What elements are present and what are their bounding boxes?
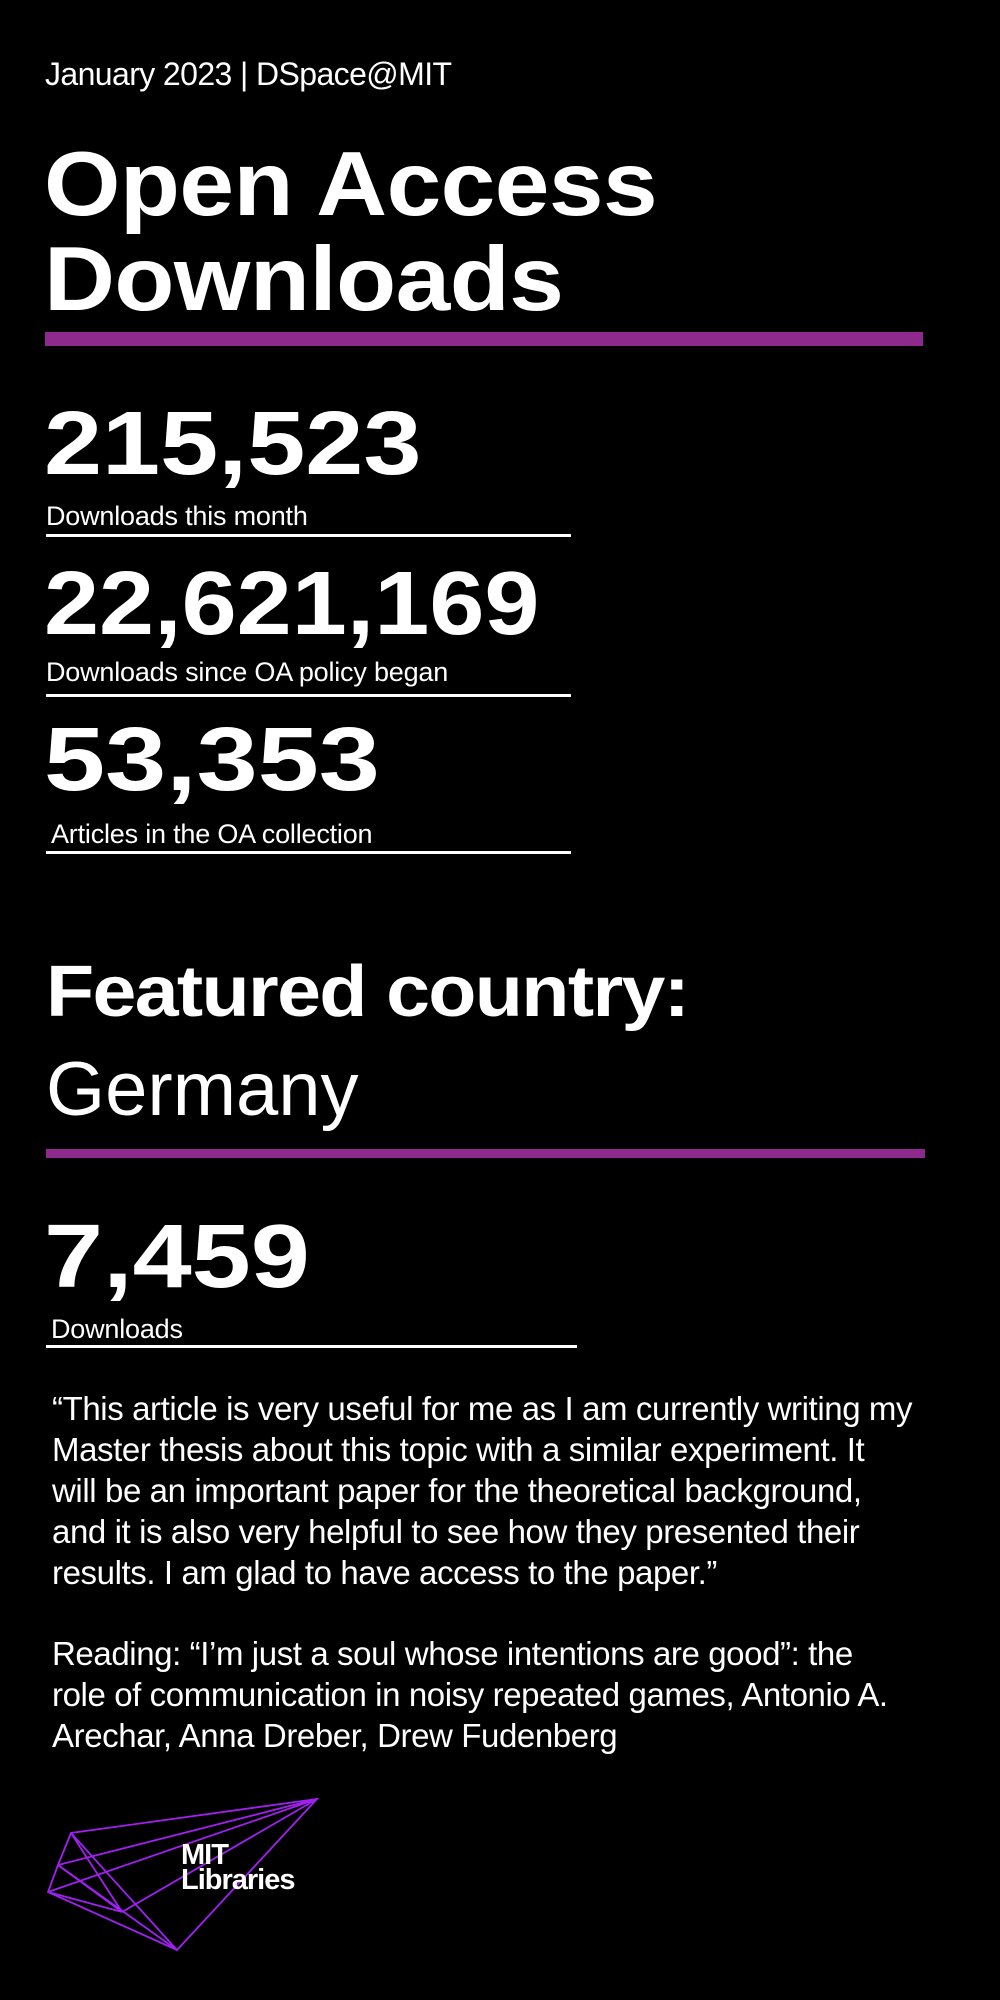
title: Downloads xyxy=(44,229,563,330)
stat: articles in collection xyxy=(44,710,571,854)
stat: downloads this month: 215,523 xyxy=(44,394,421,494)
logo: MIT Libraries xyxy=(46,1798,320,1952)
header: date and source: January 2023 | DSpace@MIT xyxy=(45,56,451,92)
stat: downloads this month xyxy=(44,394,571,537)
stat: articles in collection: 53,353 xyxy=(44,710,380,810)
purple divider 2 xyxy=(46,1149,925,1158)
stat: downloads since OA policy xyxy=(44,554,571,697)
quote text: and it is also very helpful to see how they presented their xyxy=(52,1513,859,1550)
stat: country downloads: Downloads xyxy=(51,1314,183,1344)
stat: country downloads: 7,459 xyxy=(44,1207,310,1307)
stat: downloads since OA policy: 22,621,169 xyxy=(44,554,539,654)
reading citation: Arechar, Anna Dreber, Drew Fudenberg xyxy=(52,1717,617,1754)
featured country heading: Featured country: xyxy=(46,952,688,1032)
quote text xyxy=(52,1390,912,1591)
reading citation: Reading: “I’m just a soul whose intentions are good”: the xyxy=(52,1635,853,1672)
quote text: “This article is very useful for me as I am currently writing my xyxy=(52,1390,912,1427)
title xyxy=(44,134,657,330)
logo: MIT Libraries: Libraries xyxy=(181,1864,294,1896)
stat: downloads since OA policy: Downloads since OA policy began xyxy=(46,657,448,687)
title: Open Access xyxy=(44,134,657,235)
quote text: results. I am glad to have access to the paper.” xyxy=(52,1554,717,1591)
reading citation: role of communication in noisy repeated games, Antonio A. xyxy=(52,1676,888,1713)
purple divider xyxy=(45,332,923,346)
quote text: will be an important paper for the theoretical background, xyxy=(52,1472,862,1509)
stat: country downloads xyxy=(44,1207,577,1348)
stat: downloads this month: Downloads this month xyxy=(46,501,308,531)
logo: MIT Libraries: MIT xyxy=(181,1839,228,1871)
stat: articles in collection: Articles in the OA collection xyxy=(51,819,372,849)
reading citation xyxy=(52,1635,888,1754)
country name: Germany xyxy=(46,1047,359,1132)
quote text: Master thesis about this topic with a similar experiment. It xyxy=(52,1431,864,1468)
